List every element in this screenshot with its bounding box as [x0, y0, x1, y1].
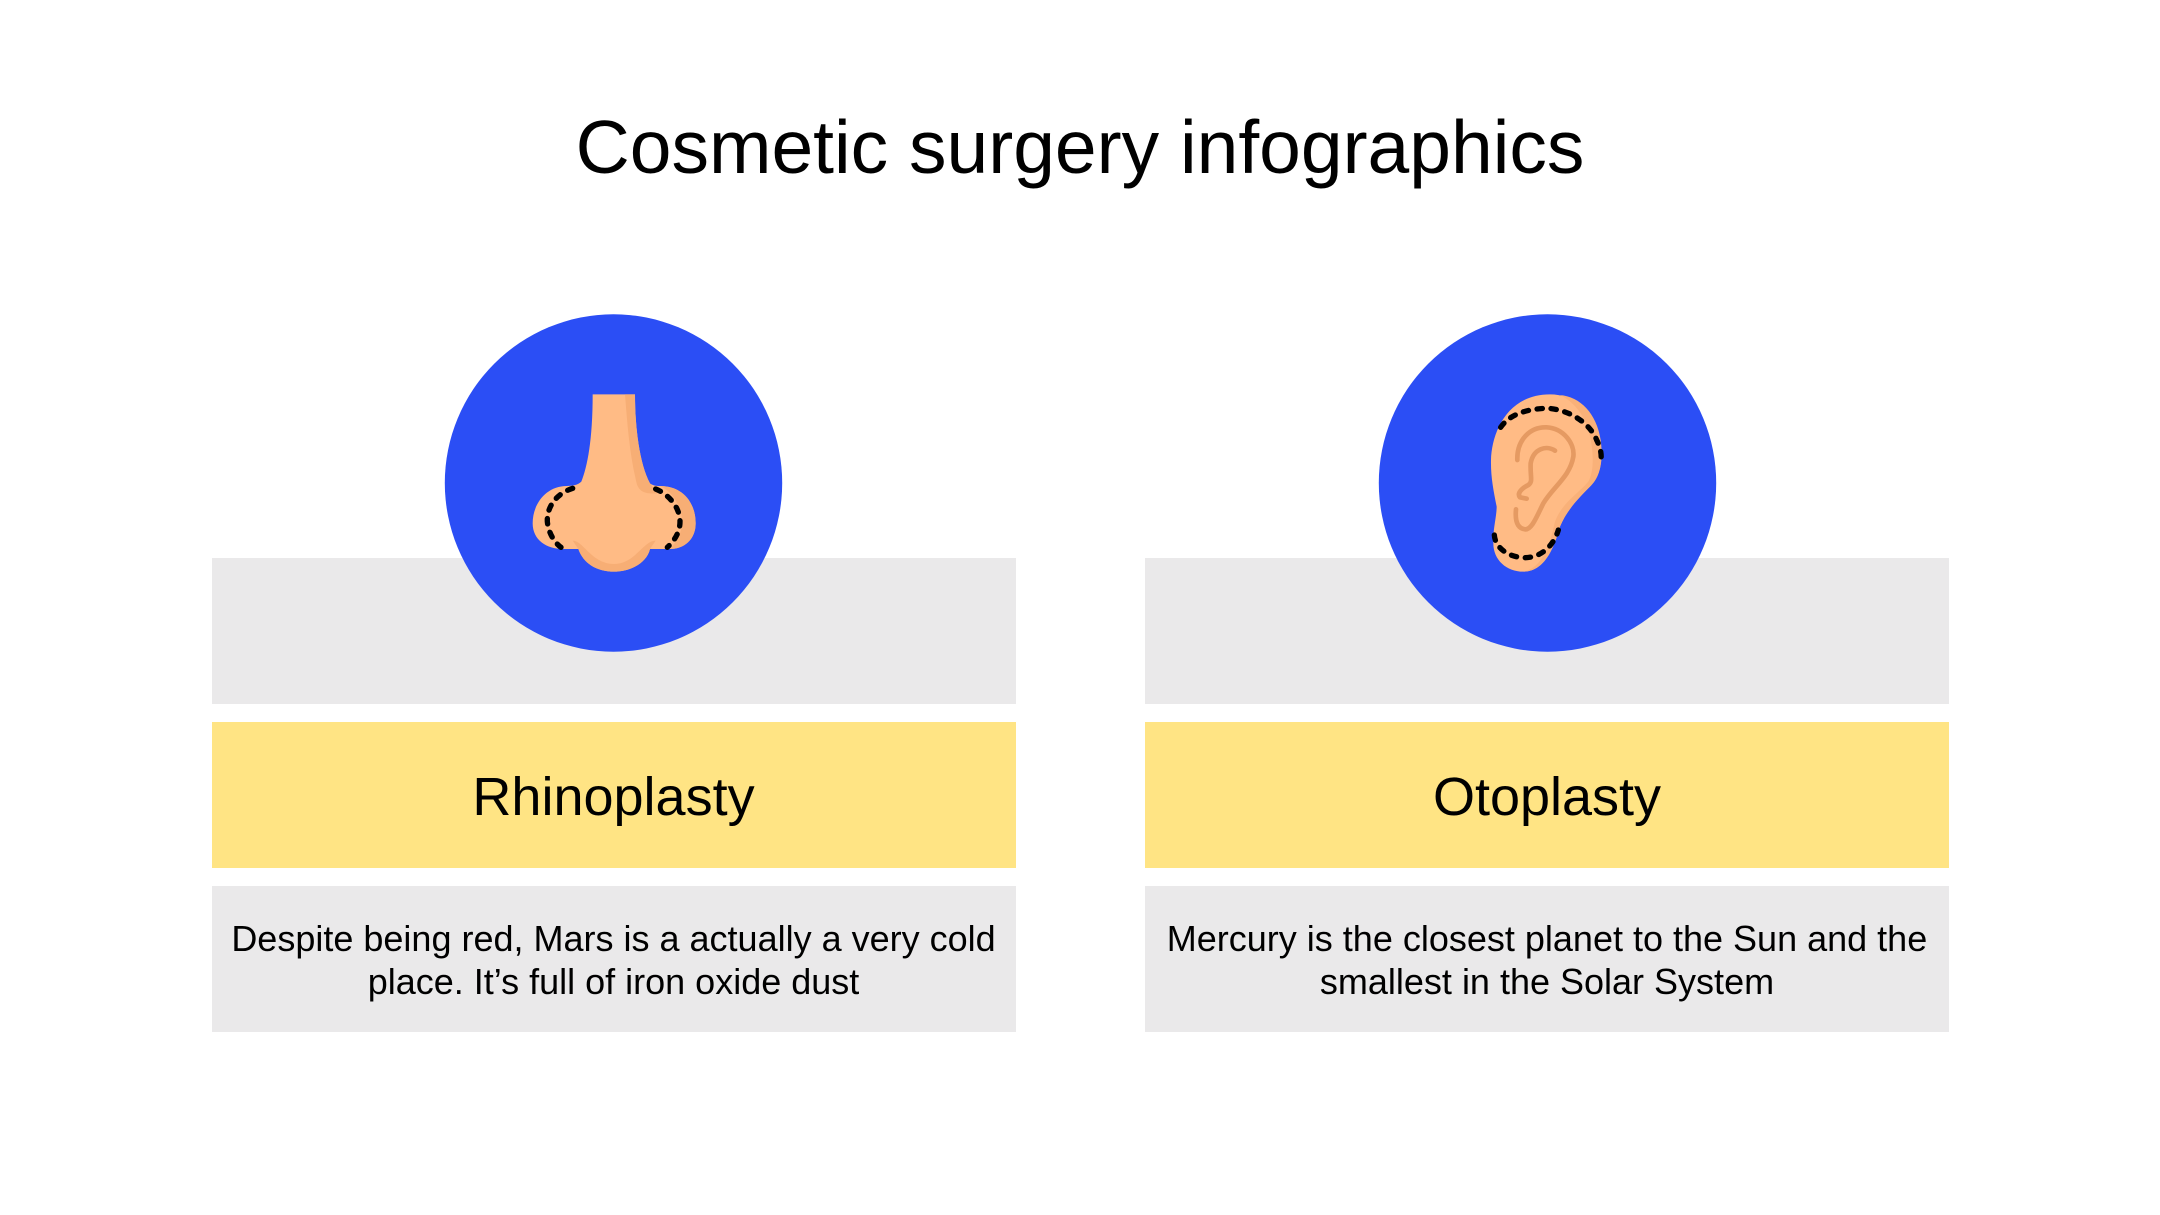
panel: otoplasty top band — [1145, 558, 1949, 704]
panel: otoplasty description: Mercury is the closest planet to the Sun and the — [1167, 918, 1927, 959]
panel: rhinoplasty top band — [212, 558, 1016, 704]
panel: otoplasty heading band: Otoplasty — [1433, 766, 1661, 826]
panel: otoplasty description — [1145, 886, 1949, 1032]
panel: rhinoplasty heading band: Rhinoplasty — [472, 766, 755, 826]
title: Cosmetic surgery infographics — [576, 105, 1584, 189]
panel: rhinoplasty description — [212, 886, 1016, 1032]
panel: otoplasty heading band — [1145, 722, 1949, 868]
panel: rhinoplasty description: place. It’s full of iron oxide dust — [368, 961, 859, 1002]
panel: otoplasty description: smallest in the Solar System — [1320, 961, 1774, 1002]
panel: rhinoplasty heading band — [212, 722, 1016, 868]
panel: rhinoplasty description: Despite being red, Mars is a actually a very cold — [231, 918, 996, 959]
